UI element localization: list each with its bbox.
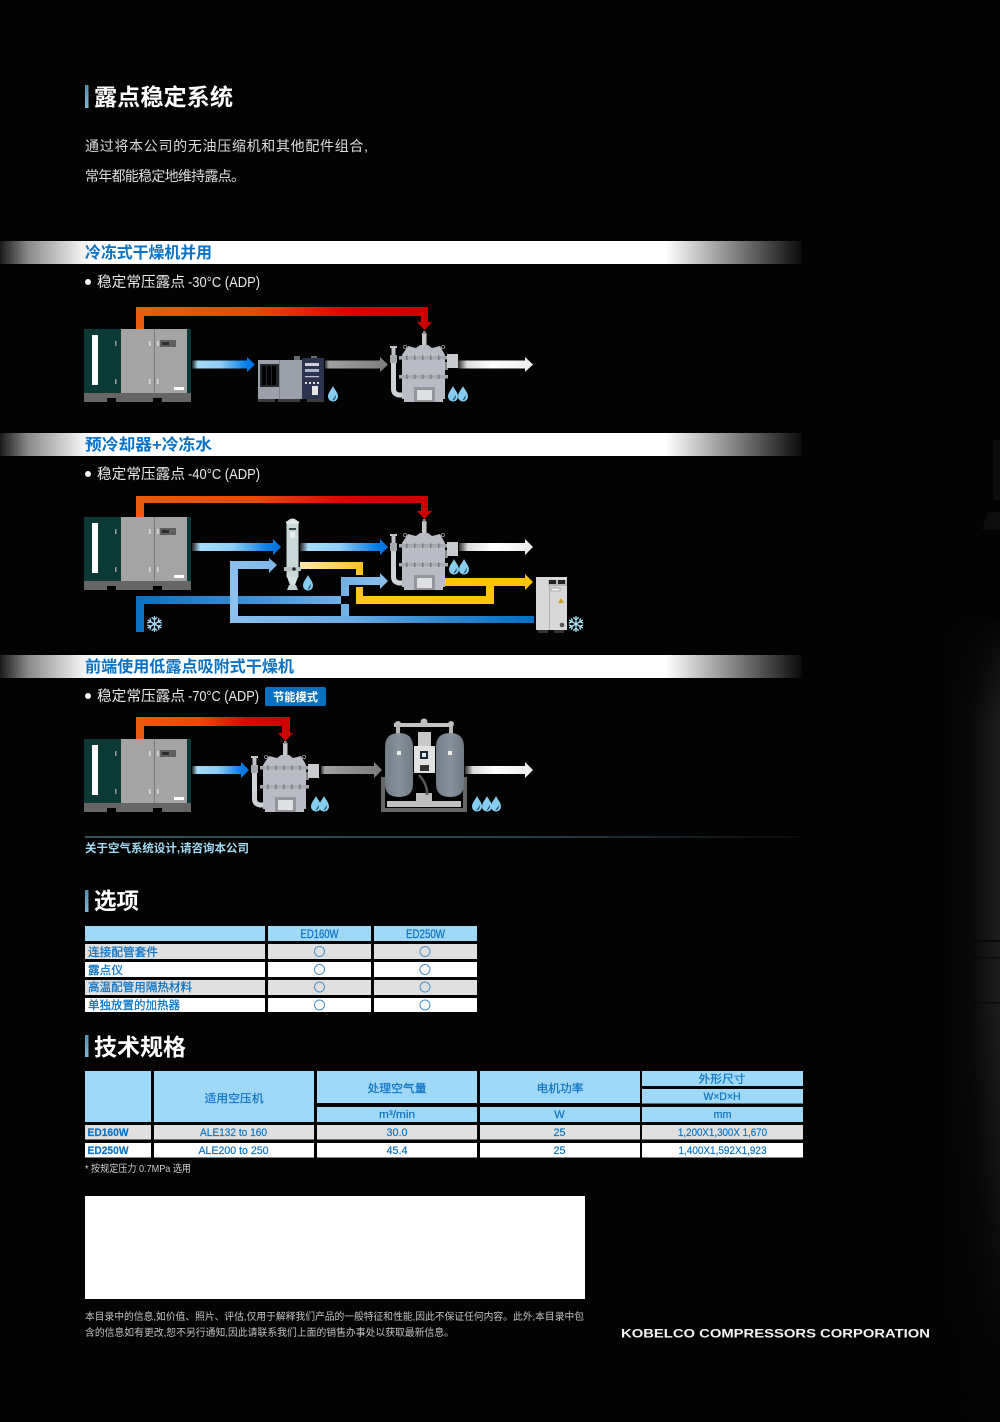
section bar: 前端使用低露点吸附式干燥机 [0, 655, 802, 678]
arrow: compressor to tower [192, 762, 249, 778]
bullet: -30°C: -30°C (ADP) [188, 274, 260, 291]
compressor [84, 739, 191, 812]
intro text [85, 138, 368, 184]
chiller [536, 577, 567, 633]
spec row: ED250W: ED250W [88, 1145, 129, 1157]
spec row: ED250W: 25 [554, 1145, 566, 1157]
disclaimer text [85, 1310, 584, 1339]
spec row: ED160W: ED160W [88, 1127, 129, 1139]
spec row: ED160W: 1,200X1,300X 1,670 [678, 1127, 767, 1139]
table footnote: * 按规定压力 0.7MPa 选用 [85, 1162, 191, 1175]
heat-of-compression dryer [390, 331, 458, 402]
hot air pipe [136, 307, 432, 330]
company name: KOBELCO COMPRESSORS CORPORATION [621, 1328, 930, 1340]
spec row: ED160W: 30.0 [386, 1127, 408, 1139]
heading: 技术规格: 技术规格 [94, 1034, 186, 1060]
intro text: 常年都能稳定地维持露点。 [85, 168, 245, 184]
arrow: outlet air [459, 539, 533, 555]
option row: 高温配管用隔热材料 [85, 980, 477, 995]
spec header [85, 1071, 803, 1122]
refrigerated dryer [258, 356, 324, 402]
arrow: compressor to pre-cooler [192, 539, 281, 555]
arrow: outlet air [458, 357, 533, 372]
hot air pipe [136, 496, 432, 519]
bullet: -70°C with tag [85, 687, 326, 706]
spec header: m³/min [379, 1109, 415, 1121]
spec header: 处理空气量 [368, 1081, 426, 1095]
diagram 1: refrigerated dryer [84, 307, 533, 402]
option row: 露点仪: 露点仪 [88, 964, 124, 977]
options table [85, 926, 477, 1012]
spec row: ED250W: ALE200 to 250 [198, 1145, 268, 1157]
white contact box [85, 1196, 585, 1299]
tower [251, 741, 319, 812]
chilled water pipe: lower [230, 558, 534, 623]
yellow water loop [300, 562, 533, 604]
section bar: 预冷却器+冷冻水 [0, 433, 802, 456]
compressor [84, 517, 191, 590]
diagram 3: low dew point adsorption dryer [84, 717, 533, 812]
spec row: ED250W [85, 1143, 803, 1158]
chilled water pipe: upper [136, 573, 388, 632]
drain drop [328, 386, 338, 402]
hot air pipe [136, 717, 293, 741]
option row: 连接配管套件 [85, 944, 477, 959]
spec row: ED160W [85, 1125, 803, 1140]
drain drop [303, 575, 313, 591]
drain drops [311, 796, 329, 812]
bullet: -70°C with tag: 稳定常压露点 [97, 688, 185, 705]
disclaimer text: 本目录中的信息,如价值、照片、评估,仅用于解释我们产品的一般特征和性能,因此不保证任何内容。此外,本目录中包 [85, 1310, 584, 1323]
arrow: outlet air [465, 762, 533, 778]
arrow: compressed air to dryer [192, 357, 255, 372]
note rule and consult text: 关于空气系统设计,请咨询本公司 [85, 841, 249, 855]
bullet: -40°C [85, 466, 260, 483]
spec row: ED250W: 1,400X1,592X1,923 [678, 1145, 766, 1157]
option row: 连接配管套件: 连接配管套件 [88, 945, 158, 959]
drain drops [448, 386, 468, 402]
pre-cooler [284, 518, 301, 590]
option row: 单独放置的加热器: 单独放置的加热器 [88, 998, 180, 1012]
drain drops [472, 796, 501, 812]
bullet: -30°C: 稳定常压露点 [97, 274, 185, 291]
spec header: 适用空压机 [204, 1091, 264, 1105]
spec header: W×D×H [704, 1091, 741, 1103]
arrow: tower to adsorption dryer [321, 762, 382, 778]
section bar: 预冷却器+冷冻水: 预冷却器+冷冻水 [85, 435, 212, 454]
section bar: 前端使用低露点吸附式干燥机: 前端使用低露点吸附式干燥机 [85, 657, 294, 676]
snowflake: water inlet [147, 616, 162, 632]
bullet: -40°C: -40°C (ADP) [188, 466, 260, 483]
adsorption dryer [381, 718, 467, 812]
spec row: ED250W: 45.4 [386, 1145, 408, 1157]
spec header: 电机功率 [536, 1081, 584, 1095]
spec row: ED160W: 25 [554, 1127, 566, 1139]
options header row [85, 926, 477, 941]
snowflake: chiller [568, 616, 584, 632]
bullet: -70°C with tag: -70°C (ADP) [188, 688, 259, 705]
spec row: ED160W: ALE132 to 160 [200, 1127, 267, 1139]
options header row: ED160W [300, 929, 339, 941]
bullet: -40°C: 稳定常压露点 [97, 466, 185, 483]
disclaimer text: 含的信息如有更改,恕不另行通知,因此请联系我们上面的销售办事处以获取最新信息。 [85, 1326, 454, 1339]
arrow: pre-cooler to tower [300, 539, 388, 555]
bullet: -30°C [85, 274, 260, 291]
diagram 2: pre-cooler + chilled water [84, 496, 584, 633]
specification table [85, 1071, 803, 1158]
intro text: 通过将本公司的无油压缩机和其他配件组合, [85, 138, 368, 154]
heading: 选项: 选项 [94, 889, 139, 914]
heading: 露点稳定系统: 露点稳定系统 [94, 84, 233, 110]
section bar: 冷冻式干燥机并用: 冷冻式干燥机并用 [85, 243, 212, 262]
section bar: 冷冻式干燥机并用 [0, 241, 802, 264]
cross pipe [341, 604, 349, 616]
option row: 露点仪 [85, 962, 477, 977]
tower [390, 519, 458, 590]
faded machine photo at right edge [940, 440, 1000, 1422]
bullet: -70°C with tag: 节能模式 [273, 690, 318, 704]
spec header: 外形尺寸 [698, 1072, 746, 1086]
options header row: ED250W [406, 929, 445, 941]
compressor [84, 329, 191, 402]
drain drops [449, 559, 469, 575]
arrow: air to tower [325, 357, 388, 372]
spec header: W [554, 1109, 565, 1121]
spec header: mm [714, 1109, 732, 1121]
option row: 高温配管用隔热材料: 高温配管用隔热材料 [88, 980, 193, 994]
option row: 单独放置的加热器 [85, 998, 477, 1012]
